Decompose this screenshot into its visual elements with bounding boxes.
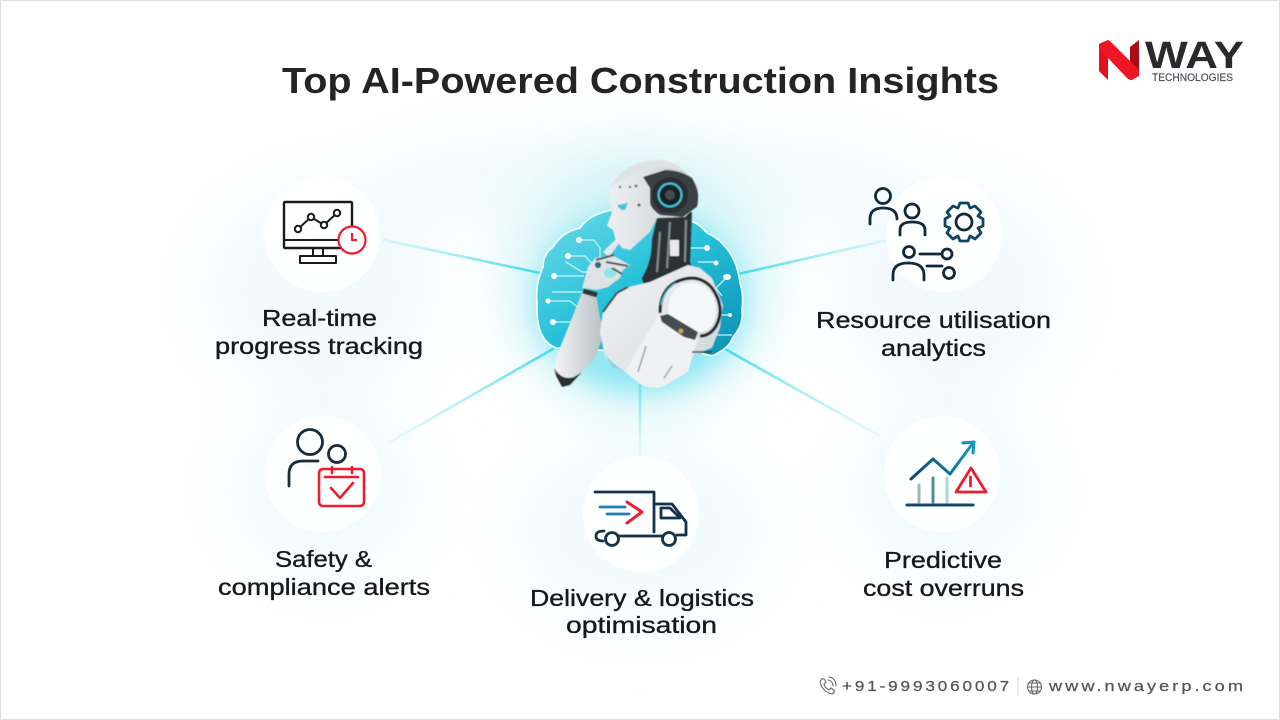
icon: person with calendar (289, 430, 364, 506)
panel: safety and compliance alerts (218, 416, 430, 600)
label: optimisation (566, 612, 717, 638)
label: progress tracking (215, 333, 423, 359)
central glow (505, 155, 775, 415)
label (215, 305, 423, 359)
icon: phone (820, 677, 836, 694)
title: Top AI-Powered Construction Insights (282, 60, 999, 101)
label: Real-time (262, 305, 377, 331)
label (863, 547, 1024, 601)
icon: people, gear and connections (870, 188, 983, 280)
label: Delivery & logistics (530, 585, 754, 611)
panel: resource utilisation analytics (816, 176, 1051, 361)
footer contact bar (820, 677, 1246, 696)
icon: globe (1028, 680, 1042, 694)
upper arm panel (625, 315, 698, 388)
neck mechanics (642, 212, 692, 290)
forearm (554, 290, 605, 387)
label (816, 307, 1051, 361)
shoulder ball (668, 283, 716, 332)
icon: monitor with chart and clock (284, 202, 366, 263)
label: compliance alerts (218, 574, 430, 600)
panel: delivery and logistics optimisation (530, 456, 754, 638)
robot (554, 160, 723, 388)
head (607, 160, 698, 250)
footer contact bar: +91-9993060007 (842, 678, 1012, 695)
label: Predictive (884, 547, 1002, 573)
label (530, 585, 754, 638)
logo: NWAY Technologies: WAY (1145, 35, 1244, 77)
icon: rising chart with warning (907, 442, 986, 505)
label: analytics (881, 335, 986, 361)
ear camera (643, 170, 698, 217)
label: Safety & (275, 546, 372, 572)
icon: delivery truck (595, 492, 686, 546)
elbow joint (660, 314, 698, 340)
connector lines (384, 240, 888, 456)
label (218, 546, 430, 600)
hand (582, 255, 630, 290)
panel: real-time progress tracking (215, 176, 423, 359)
label: cost overruns (863, 575, 1024, 601)
torso and shoulder (600, 265, 723, 388)
footer contact bar: www.nwayerp.com (1048, 678, 1246, 695)
logo: NWAY Technologies: TECHNOLOGIES (1152, 72, 1233, 84)
brain with circuit traces (537, 210, 743, 356)
central illustration: AI robot and brain (537, 160, 743, 388)
logo: NWAY Technologies (1099, 35, 1244, 84)
panel: predictive cost overruns (863, 416, 1024, 601)
label: Resource utilisation (816, 307, 1051, 333)
